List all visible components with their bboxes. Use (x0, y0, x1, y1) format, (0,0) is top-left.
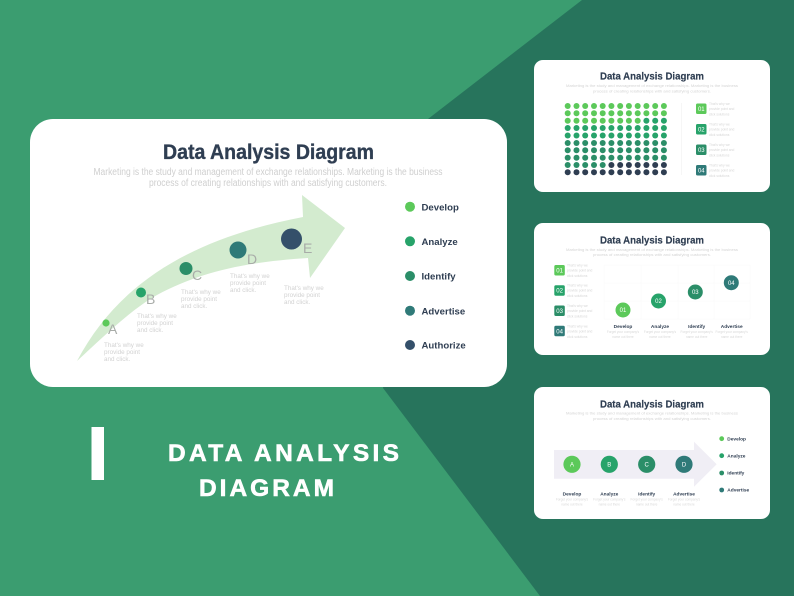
step C: name out there (636, 502, 658, 506)
step B: Analyze (600, 491, 619, 497)
legend: Authorize (422, 341, 466, 352)
step 04 (716, 275, 748, 339)
page heading (168, 440, 399, 502)
numbered key: click solutions (567, 274, 588, 278)
step 02: name out there (649, 335, 671, 339)
card subtitle: Marketing is the study and management of exchange relationships. Marketing is the business (566, 83, 738, 88)
numbered key: 02 (698, 128, 705, 134)
numbered key: provide point and (709, 168, 734, 172)
step C: Identify (638, 491, 656, 497)
stage B marker: That's why we (137, 313, 177, 320)
step C (631, 456, 663, 506)
numbered key: 01 (556, 268, 564, 274)
stage A marker: That's why we (104, 342, 144, 349)
step B: name out there (599, 502, 620, 506)
main card subtitle: process of creating relationships with and satisfying customers. (149, 178, 387, 189)
step 04: Forget your company's (716, 330, 748, 334)
stage E marker: That's why we (284, 285, 324, 292)
step A (556, 456, 589, 506)
card title: Data Analysis Diagram (600, 70, 704, 82)
step A: name out there (561, 502, 583, 506)
step 02: 02 (655, 299, 662, 305)
numbered key (554, 264, 592, 339)
numbered key (696, 102, 734, 178)
page heading: DIAGRAM (199, 475, 334, 502)
card subtitle (566, 411, 738, 421)
step 03: Identify (688, 324, 706, 330)
numbered key: 04 (698, 168, 705, 174)
card subtitle: Marketing is the study and management of exchange relationships. Marketing is the business (566, 247, 738, 252)
legend: Advertise (422, 306, 465, 317)
numbered key: 02 (556, 289, 564, 295)
step D: D (682, 462, 687, 468)
step 03: name out there (686, 335, 708, 339)
numbered key: That's why we (567, 324, 588, 328)
panel: rising steps card (534, 223, 770, 355)
numbered key: 03 (698, 148, 705, 154)
numbered key: That's why we (709, 102, 730, 106)
panel: dot matrix card (534, 60, 770, 192)
numbered key: 03 (556, 309, 564, 315)
curved growth arrow (77, 195, 345, 361)
numbered key: That's why we (709, 122, 730, 126)
step 02: Analyze (651, 324, 669, 330)
legend: Analyze (422, 237, 458, 248)
dot matrix chart (565, 103, 667, 175)
stage C marker: provide point (181, 296, 217, 303)
stage E marker (281, 228, 324, 306)
step 01: name out there (612, 335, 634, 339)
stage E marker: E (303, 240, 312, 256)
numbered key: click solutions (709, 133, 730, 137)
numbered key: provide point and (709, 148, 734, 152)
legend (719, 436, 749, 494)
numbered key: click solutions (567, 335, 588, 339)
step D: Advertise (673, 491, 695, 497)
stage D marker (230, 242, 270, 294)
numbered key: 04 (556, 329, 564, 335)
numbered key: provide point and (709, 128, 734, 132)
numbered key: provide point and (709, 107, 734, 111)
stage C marker: C (192, 267, 202, 283)
numbered key: click solutions (567, 294, 588, 298)
step 01: 01 (620, 308, 627, 314)
step 02 (644, 294, 677, 339)
stage D marker: and click. (230, 287, 256, 294)
legend: Identify (422, 272, 456, 283)
step 03 (681, 284, 713, 339)
legend: Analyze (727, 453, 746, 459)
step 01: Develop (614, 324, 632, 330)
main card title: Data Analysis Diagram (163, 141, 374, 164)
step 04: 04 (728, 281, 735, 287)
numbered key: That's why we (567, 304, 588, 308)
accent bar (92, 427, 104, 480)
card title: Data Analysis Diagram (600, 234, 704, 246)
dark green angled background shape (383, 0, 794, 596)
card subtitle: process of creating relationships with and satisfying customers. (593, 88, 711, 94)
legend: Develop (727, 436, 746, 442)
stage D marker: D (247, 251, 257, 267)
stage A marker: and click. (104, 356, 130, 363)
stage E marker: and click. (284, 299, 310, 306)
card subtitle: process of creating relationships with and satisfying customers. (593, 416, 711, 421)
numbered key: provide point and (567, 268, 592, 272)
card subtitle: process of creating relationships with and satisfying customers. (593, 252, 711, 257)
stage A marker: A (108, 321, 118, 337)
step B: B (607, 462, 611, 468)
panel: process arrow card (534, 387, 770, 519)
main card subtitle (94, 167, 442, 189)
numbered key: click solutions (567, 314, 588, 318)
stage B marker (136, 288, 177, 334)
step D: Forget your company's (668, 497, 701, 501)
step D: name out there (673, 502, 695, 506)
stage A marker (102, 319, 144, 363)
step D (668, 456, 701, 506)
panel: main diagram card (30, 119, 507, 387)
numbered key: That's why we (567, 284, 588, 288)
stage A marker: provide point (104, 349, 140, 356)
stage C marker: That's why we (181, 289, 221, 296)
main card subtitle: Marketing is the study and management of exchange relationships. Marketing is the business (94, 167, 442, 178)
process arrow (554, 442, 717, 487)
numbered key: click solutions (709, 154, 730, 158)
legend: Identify (727, 471, 745, 477)
legend: Advertise (727, 488, 749, 494)
numbered key: That's why we (709, 143, 730, 147)
step A: Forget your company's (556, 497, 589, 501)
step 03: 03 (692, 290, 699, 296)
card subtitle (566, 247, 738, 257)
numbered key: click solutions (709, 112, 730, 116)
step A: A (570, 462, 574, 468)
legend (405, 202, 466, 352)
numbered key: provide point and (567, 329, 592, 333)
stage C marker (180, 262, 221, 310)
numbered key: provide point and (567, 309, 592, 313)
step 03: Forget your company's (681, 330, 713, 334)
stage C marker: and click. (181, 303, 207, 310)
step 04: name out there (721, 335, 743, 339)
card subtitle (566, 83, 738, 94)
step 01 (607, 302, 640, 339)
stage D marker: That's why we (230, 273, 270, 280)
legend: Develop (422, 202, 459, 213)
stage D marker: provide point (230, 280, 266, 287)
stage B marker: B (146, 291, 155, 307)
page heading: DATA ANALYSIS (168, 440, 399, 467)
numbered key: provide point and (567, 289, 592, 293)
step B (593, 456, 626, 506)
step 02: Forget your company's (644, 330, 677, 334)
numbered key: That's why we (567, 264, 588, 268)
card title: Data Analysis Diagram (600, 398, 704, 410)
numbered key: 01 (698, 107, 705, 113)
card subtitle: Marketing is the study and management of exchange relationships. Marketing is the business (566, 411, 738, 416)
step A: Develop (563, 491, 581, 497)
numbered key: That's why we (709, 164, 730, 168)
step C: C (645, 462, 650, 468)
step C: Forget your company's (631, 497, 663, 501)
step B: Forget your company's (593, 497, 626, 501)
stage B marker: provide point (137, 320, 173, 327)
stage E marker: provide point (284, 292, 320, 299)
stage B marker: and click. (137, 327, 163, 334)
numbered key: click solutions (709, 174, 730, 178)
step 04: Advertise (721, 324, 743, 330)
step 01: Forget your company's (607, 330, 640, 334)
